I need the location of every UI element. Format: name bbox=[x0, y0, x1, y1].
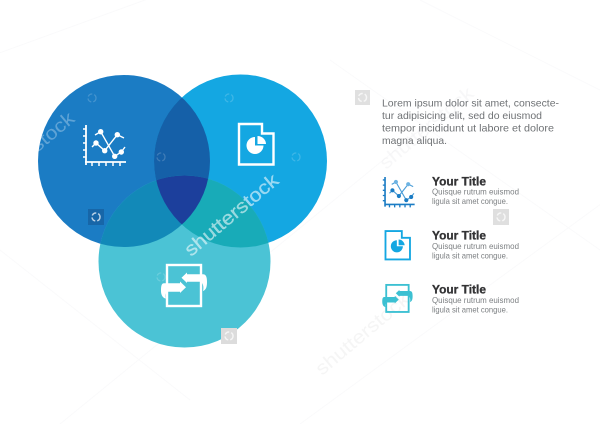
circle: left bbox=[38, 75, 210, 247]
legend description: ligula sit amet congue. bbox=[432, 304, 508, 314]
legend item: swap bbox=[382, 284, 519, 314]
overlap: left and bottom bbox=[100, 180, 182, 247]
overlap: right and bottom bbox=[156, 176, 268, 248]
legend description: Quisque rutrum euismod bbox=[432, 295, 519, 305]
watermark: shutterstock main: shutterstock bbox=[181, 170, 284, 261]
icon: document with pie chart bbox=[239, 124, 274, 164]
watermark: shutterstock upper right: shutterstock bbox=[376, 83, 479, 174]
icon: document with swap arrows bbox=[161, 265, 207, 306]
legend item: chart bbox=[383, 176, 519, 207]
legend description: Quisque rutrum euismod bbox=[432, 186, 519, 196]
legend description bbox=[432, 186, 519, 206]
infographic canvas bbox=[38, 74, 558, 374]
circle: bottom bbox=[98, 176, 270, 348]
legend title: Your Title bbox=[432, 230, 486, 242]
circle: right bbox=[154, 74, 327, 248]
legend icon: document bbox=[385, 231, 410, 259]
legend title: Your Title bbox=[432, 176, 486, 188]
intro paragraph: Lorem ipsum dolor sit amet, consecte- bbox=[382, 98, 559, 110]
legend title: Your Title bbox=[432, 284, 486, 296]
legend icon: chart bbox=[383, 177, 415, 207]
legend item: document bbox=[385, 230, 519, 260]
overlap: centre bbox=[156, 176, 208, 224]
intro paragraph: tur adipisicing elit, sed do eiusmod bbox=[382, 111, 542, 122]
venn diagram bbox=[38, 74, 327, 348]
intro paragraph: tempor incididunt ut labore et dolore bbox=[382, 124, 554, 134]
legend description: ligula sit amet congue. bbox=[432, 196, 508, 206]
legend description: ligula sit amet congue. bbox=[432, 250, 508, 260]
legend icon: swap bbox=[382, 285, 413, 312]
intro paragraph: magna aliqua. bbox=[382, 136, 447, 147]
legend description bbox=[432, 241, 519, 260]
intro paragraph bbox=[382, 98, 559, 147]
watermark: shutterstock lower right: shutterstock bbox=[312, 289, 415, 380]
icon: line chart bbox=[83, 125, 126, 166]
legend description: Quisque rutrum euismod bbox=[432, 241, 519, 251]
legend description bbox=[432, 295, 519, 314]
watermark squares bbox=[88, 90, 509, 344]
overlap: left and right bbox=[154, 98, 210, 180]
